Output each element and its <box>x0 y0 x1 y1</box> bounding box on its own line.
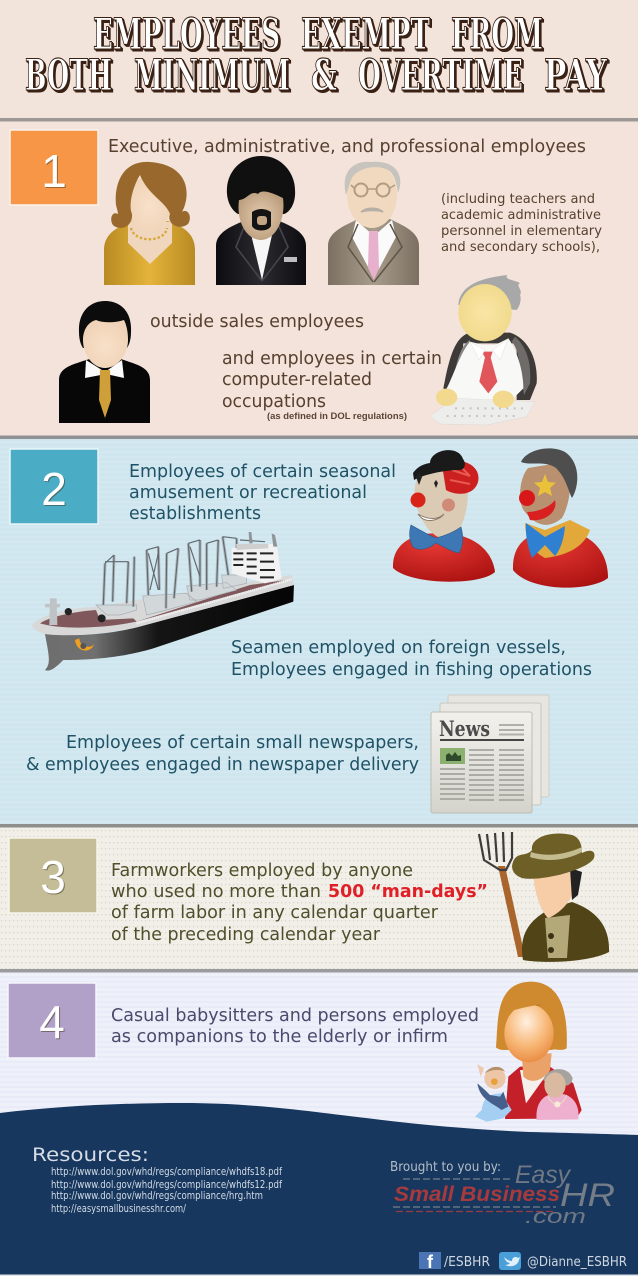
icon: facebook <box>419 1252 441 1272</box>
text: newspaper employees: Employees of certain small newspapers, <box>66 732 419 753</box>
text: seasonal amusement employees: amusement or recreational <box>129 482 367 503</box>
text: facebook handle: /ESBHR <box>444 1255 490 1270</box>
text: outside sales employees: outside sales employees <box>150 311 364 332</box>
text: resource links: http://www.dol.gov/whd/regs/compliance/whdfs18.pdf <box>51 1166 282 1178</box>
text: DOL note: (as defined in DOL regulations) <box>267 411 407 422</box>
text: babysitters and companions: as companions to the elderly or infirm <box>111 1026 448 1047</box>
text: seasonal amusement employees: establishments <box>129 503 261 524</box>
icon: twitter <box>499 1252 521 1270</box>
text: seamen and fishing: Employees engaged in fishing operations <box>231 659 592 680</box>
number box 4 <box>8 983 96 1058</box>
icon: clown with black hat <box>393 450 495 582</box>
number box 4: 4 <box>39 996 65 1048</box>
title: FROM <box>451 10 543 60</box>
logo: Easy Small Business HR: Small Business <box>394 1183 560 1206</box>
panel: section 1 <box>0 118 638 437</box>
number box 3 <box>9 838 97 913</box>
panel: section 2 <box>0 436 638 826</box>
icon: woman in gold <box>104 162 195 285</box>
text: babysitters and companions: Casual babysitters and persons employed <box>111 1005 479 1026</box>
panel: title band <box>0 0 638 119</box>
text: resource links: http://easysmallbusinesshr.com/ <box>51 1203 186 1215</box>
number box 3: 3 <box>40 851 66 903</box>
text: seasonal amusement employees <box>129 461 396 524</box>
text: seasonal amusement employees: Employees of certain seasonal <box>129 461 396 482</box>
text: farmworkers: of the preceding calendar year <box>111 924 381 945</box>
text: twitter handle: @Dianne_ESBHR <box>527 1255 627 1270</box>
number box 1 <box>10 130 98 205</box>
text: resource links <box>51 1166 282 1215</box>
logo: Easy Small Business HR: Easy <box>515 1161 571 1189</box>
text: farmworkers: of farm labor in any calendar quarter <box>111 902 439 923</box>
icon: sales man in black suit <box>59 301 150 423</box>
callout: 500 man-days: 500 “man-days” <box>328 881 488 902</box>
text: computer occupations: and employees in certain <box>222 348 442 369</box>
title: BOTH <box>25 51 112 101</box>
text: resource links: http://www.dol.gov/whd/regs/compliance/whdfs12.pdf <box>51 1179 282 1191</box>
number box 2: 2 <box>41 463 67 515</box>
icon: newspaper stack <box>431 695 549 813</box>
title <box>25 10 608 101</box>
text: seamen and fishing: Seamen employed on foreign vessels, <box>231 637 566 658</box>
logo: Easy Small Business HR: .com <box>525 1206 586 1228</box>
text: including teachers note: personnel in elementary <box>441 223 602 239</box>
panel: footer <box>0 1103 638 1276</box>
icon: caregiver with baby and elder <box>475 982 582 1122</box>
title: & <box>311 51 337 101</box>
text: computer occupations: computer-related <box>222 369 372 390</box>
logo: Easy Small Business HR <box>393 1161 615 1228</box>
number box 2 <box>10 449 98 524</box>
text: babysitters and companions <box>111 1005 479 1047</box>
icon: older man with glasses <box>328 162 419 285</box>
text: newspaper employees: & employees engaged in newspaper delivery <box>26 754 419 775</box>
text: including teachers note: academic administrative <box>441 207 601 223</box>
text: newspaper employees <box>26 732 419 775</box>
text: including teachers note: and secondary schools), <box>441 239 600 255</box>
icon: farmer with pitchfork <box>479 832 609 962</box>
number box 1: 1 <box>41 145 67 197</box>
text: farmworkers <box>111 860 488 945</box>
text: including teachers note <box>441 191 602 255</box>
heading: resources: Resources: <box>32 1145 149 1166</box>
icon: cargo ship <box>32 532 294 671</box>
icon: newspaper stack: News <box>439 716 490 741</box>
title: PAY <box>544 51 608 101</box>
title: OVERTIME <box>358 51 523 101</box>
icon: man at computer keyboard <box>430 275 537 425</box>
text: seamen and fishing <box>231 637 592 680</box>
text: brought to you by: Brought to you by: <box>390 1160 501 1175</box>
panel: section 3 <box>0 824 638 971</box>
logo: Easy Small Business HR: HR <box>560 1177 615 1213</box>
text: farmworkers: who used no more than <box>111 881 321 902</box>
title: EXEMPT <box>301 10 430 60</box>
icon: man with afro and goatee <box>216 156 306 285</box>
title: EMPLOYEES <box>93 10 280 60</box>
icon: clown with star <box>513 448 608 588</box>
text: including teachers note: (including teachers and <box>441 191 595 207</box>
text: farmworkers: Farmworkers employed by anyone <box>111 860 413 881</box>
panel: section 4 <box>0 969 638 1141</box>
text: computer occupations: occupations <box>222 391 326 412</box>
text: executive heading: Executive, administrative, and professional employees <box>108 136 586 157</box>
text: resource links: http://www.dol.gov/whd/regs/compliance/hrg.htm <box>51 1190 263 1202</box>
title: MINIMUM <box>134 51 290 101</box>
icon: facebook: f <box>427 1252 434 1272</box>
text: computer occupations <box>222 348 442 412</box>
